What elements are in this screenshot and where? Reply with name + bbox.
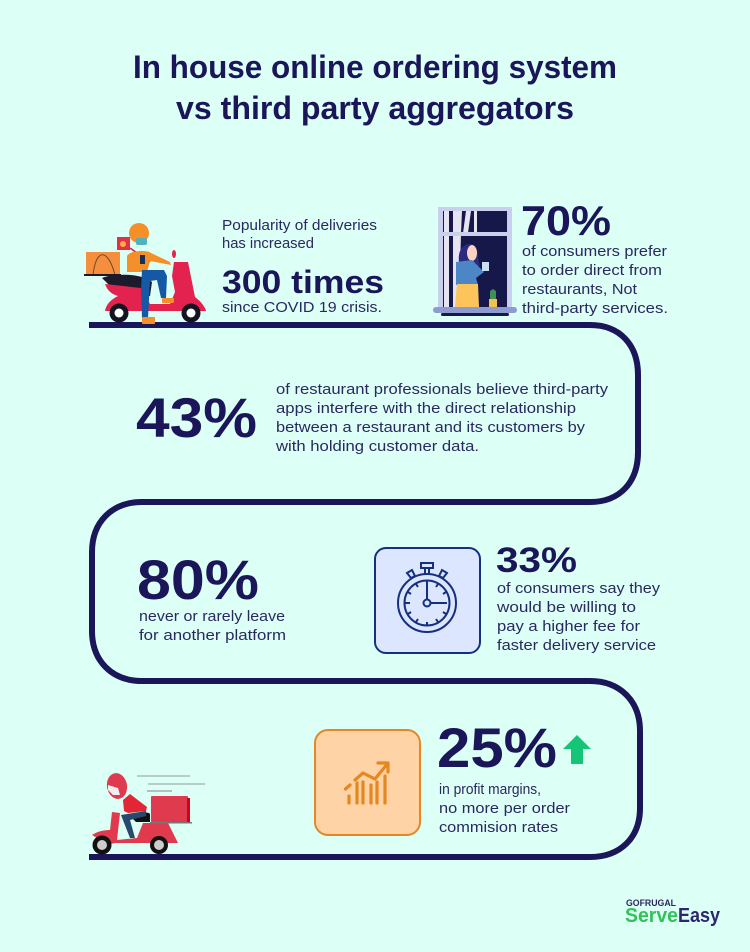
logo: ServeEasy: Easy: [678, 905, 721, 927]
title: In house online ordering system: [133, 49, 617, 85]
logo: ServeEasy: [625, 898, 721, 927]
stat: 33 percent: faster delivery service: [497, 638, 656, 654]
illustration: delivery rider with orange box: [84, 223, 206, 324]
logo: ServeEasy: GOFRUGAL: [626, 898, 676, 909]
stat: 33 percent: would be willing to: [496, 600, 636, 616]
stat: 33 percent: [496, 541, 661, 654]
stat: 33 percent: 33%: [496, 541, 577, 580]
icon: green up arrow: [563, 735, 591, 764]
logo: ServeEasy: Serve: [625, 905, 678, 927]
text: 70 percent: 70%: [521, 197, 611, 244]
text: 70 percent: restaurants, Not: [522, 282, 637, 298]
text: popularity of deliveries: 300 times: [222, 264, 384, 300]
text: popularity of deliveries: Popularity of deliveries: [222, 218, 377, 234]
icon: growth chart: [315, 730, 420, 835]
stat: 25 percent: [437, 716, 570, 836]
text: popularity of deliveries: since COVID 19 crisis.: [222, 300, 382, 316]
text: 70 percent: of consumers prefer: [522, 244, 667, 260]
stat: 25 percent: 25%: [437, 716, 557, 779]
stat: 33 percent: of consumers say they: [497, 581, 661, 597]
stat: 80 percent: 80%: [137, 548, 259, 611]
stat: 25 percent: in profit margins,: [439, 782, 541, 798]
stat: 80 percent: for another platform: [139, 628, 286, 644]
title: [133, 49, 617, 126]
stat: 25 percent: commision rates: [439, 820, 558, 836]
text: popularity of deliveries: has increased: [222, 236, 314, 252]
stat: 43 percent: [136, 382, 609, 455]
text: popularity of deliveries: [222, 218, 384, 316]
icon: stopwatch: [375, 548, 480, 653]
illustration: red scooter rider: [92, 771, 205, 854]
title: vs third party aggregators: [176, 90, 574, 126]
stat: 80 percent: [137, 548, 286, 644]
winding timeline path: [89, 325, 640, 857]
illustration: woman at window: [433, 207, 517, 316]
text: 70 percent: [521, 197, 668, 317]
stat: 43 percent: with holding customer data.: [275, 439, 479, 455]
stat: 43 percent: apps interfere with the direct relationship: [276, 401, 576, 417]
text: 70 percent: third-party services.: [522, 301, 668, 317]
stat: 43 percent: 43%: [136, 386, 257, 449]
stat: 33 percent: pay a higher fee for: [497, 619, 640, 635]
stat: 43 percent: of restaurant professionals believe third-party: [276, 382, 609, 398]
text: 70 percent: to order direct from: [522, 263, 662, 279]
stat: 43 percent: between a restaurant and its customers by: [276, 420, 586, 436]
stat: 80 percent: never or rarely leave: [139, 609, 285, 625]
stat: 25 percent: no more per order: [439, 801, 570, 817]
